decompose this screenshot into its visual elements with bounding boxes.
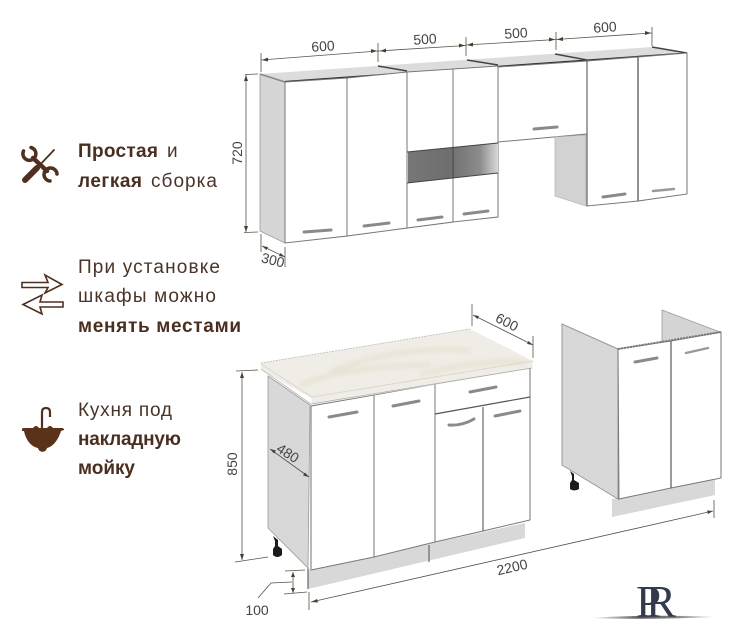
- fronts: [311, 368, 530, 570]
- dimension depth 480: [270, 440, 309, 477]
- plinth: [612, 479, 715, 517]
- dimension height 850: [224, 370, 268, 562]
- text: simple and easy assembly: сборка: [151, 171, 217, 192]
- text: cabinets can be swapped: При установке: [78, 257, 220, 278]
- text: for overlay sink: Кухня под: [78, 400, 172, 421]
- dimension width row: [261, 18, 652, 72]
- doors 600 left: [285, 72, 407, 243]
- text: simple and easy assembly: и: [167, 141, 178, 162]
- dimension width 2200: 2200: [495, 556, 529, 578]
- front edge of top: [260, 47, 687, 82]
- text: for overlay sink: мойку: [78, 458, 135, 479]
- leg: [273, 536, 282, 557]
- logo: [592, 577, 715, 627]
- swoosh: [592, 616, 715, 618]
- dimension height 720: [229, 74, 258, 232]
- text: for overlay sink: [78, 400, 181, 479]
- dimension width row: 500: [504, 24, 528, 42]
- dimension height 850: 850: [224, 452, 240, 476]
- wall cabinet dimensions: [229, 18, 652, 271]
- sink base cabinet: [562, 310, 721, 517]
- marble countertop: [261, 329, 533, 405]
- cabinet side panel: [260, 74, 285, 243]
- tall cabinet side: [555, 135, 586, 206]
- wall cabinets: [260, 47, 687, 243]
- icon: swap arrows: [22, 275, 63, 314]
- dimension plinth 100: 100: [245, 602, 269, 618]
- feature: swappable cabinets: [22, 257, 241, 337]
- dimension plinth 100: [245, 570, 307, 618]
- dimension depth 600: [472, 304, 533, 358]
- text: for overlay sink: накладную: [78, 429, 181, 450]
- dimension depth 480: 480: [274, 440, 302, 466]
- dimension depth 300: 300: [260, 249, 286, 271]
- doors: [618, 332, 721, 499]
- side panel: [562, 324, 618, 499]
- feature: overlay sink: [22, 400, 181, 479]
- feature: easy assembly: [23, 141, 217, 192]
- dimension width row: 500: [413, 30, 437, 48]
- side panel: [268, 376, 310, 568]
- cabinet top: [260, 47, 687, 82]
- dimension depth 300: [260, 234, 286, 271]
- dimension width 2200: [309, 500, 714, 610]
- text: simple and easy assembly: Простая: [78, 141, 158, 162]
- doors 500 with glass: [407, 66, 498, 228]
- dimension width row: 600: [311, 37, 335, 55]
- rear side panel: [662, 310, 720, 345]
- leg: [570, 471, 579, 490]
- text: simple and easy assembly: [78, 141, 217, 192]
- flap cabinet 500: [498, 61, 587, 142]
- text: cabinets can be swapped: шкафы можно: [78, 286, 216, 307]
- plinth: [308, 523, 525, 589]
- base cabinets: [261, 329, 533, 589]
- logo letters: R: [646, 577, 676, 627]
- text: simple and easy assembly: легкая: [78, 171, 142, 192]
- icon: wrench and screwdriver: [23, 148, 57, 181]
- dimension width row: 600: [593, 18, 617, 36]
- text: cabinets can be swapped: менять местами: [78, 316, 241, 337]
- dimension depth 600: 600: [493, 310, 521, 335]
- dimension height 720: 720: [229, 141, 245, 165]
- base cabinet dimensions: [224, 304, 714, 618]
- doors 600 right: [587, 53, 687, 206]
- logo letters: P: [636, 577, 661, 627]
- icon: sink: [22, 408, 64, 452]
- text: cabinets can be swapped: [78, 257, 241, 337]
